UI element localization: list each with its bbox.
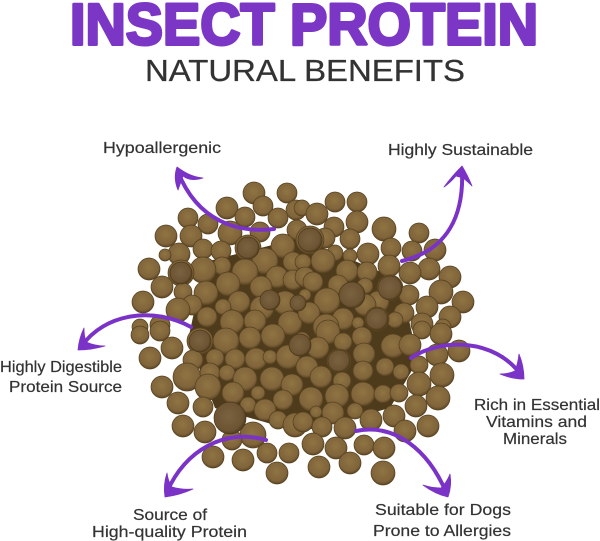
subtitle: NATURAL BENEFITS [145,53,465,88]
label: Suitable for Dogs Prone to Allergies: Prone to Allergies [373,523,511,540]
label: Rich in Essential Vitamins and Minerals: Vitamins and [486,414,587,431]
arrow: to Highly Digestible Protein Source [78,315,191,350]
label: Highly Digestible Protein Source: Highly Digestible [0,359,122,376]
label: Source of High-quality Protein: High-quality Protein [92,524,247,541]
label: Highly Sustainable: Highly Sustainable [388,142,533,159]
label: Rich in Essential Vitamins and Minerals [474,397,600,448]
label: Source of High-quality Protein [92,507,247,541]
arrow: to Highly Sustainable [402,166,472,261]
label: Suitable for Dogs Prone to Allergies: Suitable for Dogs [375,502,511,519]
label: Suitable for Dogs Prone to Allergies [373,502,511,540]
label: Rich in Essential Vitamins and Minerals: Minerals [503,431,567,448]
arrow: to Rich in Essential Vitamins and Minerals [411,345,524,379]
label: Source of High-quality Protein: Source of [133,507,208,524]
label: Highly Digestible Protein Source: Protein Source [9,379,122,396]
label: Highly Digestible Protein Source [0,359,122,396]
label: Rich in Essential Vitamins and Minerals: Rich in Essential [474,397,600,414]
label: Hypoallergenic: Hypoallergenic [103,140,221,157]
arrow: to Suitable for Dogs Prone to Allergies [356,430,451,497]
arrow: to Hypoallergenic [175,167,274,230]
arrow: to Source of High-quality Protein [164,437,266,497]
kibble pile [131,182,474,485]
